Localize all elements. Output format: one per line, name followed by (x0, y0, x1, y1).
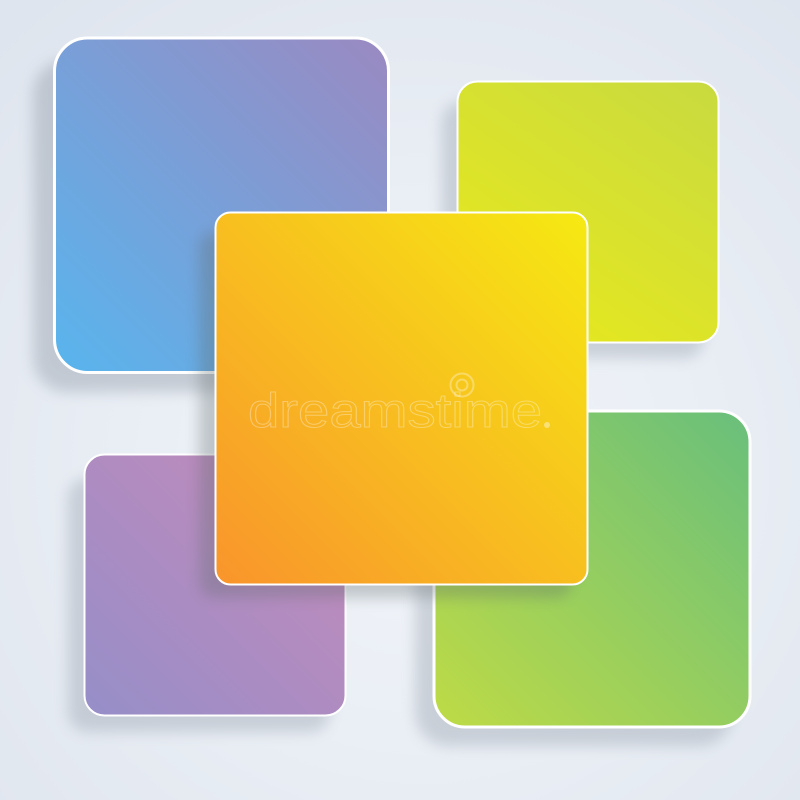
shadow: blue square (33, 60, 369, 392)
shadow: green square (415, 434, 733, 746)
panel: green square (434, 411, 750, 727)
panel: lime square (458, 82, 718, 342)
shadow: yellow square (199, 232, 572, 598)
panel: purple square (84, 454, 346, 716)
shadow: purple square (68, 478, 330, 732)
watermark text: dreamstime (248, 385, 542, 438)
watermark (248, 374, 550, 438)
shadow: lime square (442, 102, 704, 358)
panel: yellow square (216, 212, 588, 584)
panel: blue square (54, 38, 388, 372)
icon: watermark spiral (450, 374, 474, 396)
watermark dot (544, 422, 550, 428)
